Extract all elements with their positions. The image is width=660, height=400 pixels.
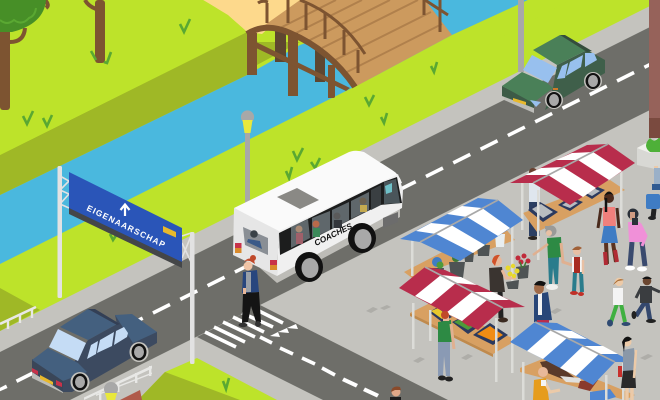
first road dash	[0, 385, 8, 391]
bus shadow	[260, 205, 400, 283]
left pole	[58, 166, 62, 298]
bridge back posts	[275, 30, 325, 82]
potted plants and bucket	[432, 234, 505, 278]
person behind top stall	[528, 168, 540, 240]
tree right	[85, 0, 105, 63]
flower seller	[489, 255, 516, 322]
stall 1 table	[523, 180, 625, 232]
car side windows	[87, 327, 128, 359]
child red vest	[570, 246, 584, 296]
bus tail lights	[235, 243, 277, 270]
car trunk	[115, 314, 157, 343]
woman grey top	[618, 337, 636, 400]
bus logo: COACHES	[312, 221, 354, 248]
bus window band	[279, 177, 402, 255]
stall 1 red awning	[510, 144, 635, 205]
canal water	[0, 0, 528, 264]
man green shirt from behind	[438, 311, 454, 382]
bridge deck	[262, 0, 452, 88]
bus roof	[234, 151, 402, 233]
car hood	[32, 348, 87, 381]
bus rear	[233, 208, 279, 276]
grass tufts	[23, 19, 437, 240]
green car front	[502, 86, 534, 108]
bus passengers	[296, 198, 367, 244]
car shadow bumper	[32, 372, 63, 393]
road centre dashes	[16, 60, 660, 381]
planter and plant	[637, 136, 660, 170]
man navy jacket	[534, 281, 552, 323]
green car roof	[533, 35, 587, 65]
woman head	[244, 262, 252, 270]
deck planks	[280, 0, 442, 73]
blue car	[32, 309, 157, 393]
car front	[32, 359, 63, 392]
woman legs	[242, 292, 261, 323]
give way triangles	[270, 324, 298, 337]
boy dark top	[632, 276, 660, 323]
green car plate and lamp	[513, 88, 558, 107]
stall 3 crates	[429, 307, 508, 345]
bus grille	[383, 212, 398, 228]
stall 3 red awning	[399, 267, 525, 330]
right lattice	[182, 233, 191, 262]
building corner	[649, 0, 660, 138]
left lattice	[60, 176, 69, 208]
car side	[63, 315, 157, 392]
green car windscreen	[523, 55, 557, 83]
sign arrow	[120, 204, 130, 216]
car wheels	[70, 342, 148, 392]
car plate and lights	[32, 368, 62, 387]
green car windows	[557, 53, 597, 79]
stall 1 poles	[521, 160, 622, 260]
bus side windows	[291, 179, 400, 248]
bus skylight	[277, 188, 319, 209]
dark grass left corner	[0, 288, 40, 331]
top grass curved edge	[0, 0, 247, 155]
stall 3 table	[410, 303, 517, 357]
green car hood	[502, 72, 553, 103]
stall 2 blue awning	[400, 198, 523, 261]
coach bus	[233, 151, 403, 283]
zebra crossing	[205, 310, 283, 347]
bus wheels	[295, 223, 376, 282]
right pole	[190, 232, 194, 364]
sign plate	[163, 226, 176, 238]
girl green trousers	[607, 278, 630, 326]
woman pink top blue skirt	[598, 192, 619, 265]
sand path	[203, 0, 300, 34]
tree left	[0, 0, 48, 110]
cross road	[197, 305, 448, 400]
tuft lower	[223, 378, 229, 389]
stall 1 crates	[528, 185, 605, 222]
grass bank	[0, 32, 300, 195]
bridge front posts and arch	[247, 28, 355, 98]
man at bottom head	[390, 387, 401, 400]
woman crossing road	[238, 255, 261, 327]
stall 2 poles	[411, 225, 514, 285]
lower cross road dashes	[342, 378, 379, 398]
green car	[502, 35, 605, 113]
sign text: EIGENAARSCHAP	[85, 203, 167, 250]
sign gantry	[58, 166, 194, 364]
stall 2 table	[404, 222, 515, 278]
lower railing	[84, 366, 152, 400]
stall 4 poles	[522, 362, 624, 400]
car windscreen	[49, 329, 86, 361]
street lamp	[241, 110, 254, 230]
woman headscarf pink top	[625, 208, 647, 272]
woman jacket	[242, 270, 259, 293]
sign board	[69, 172, 182, 262]
green car side	[545, 50, 605, 110]
lower grass corner	[138, 358, 277, 400]
stall 4 blue awning	[510, 322, 633, 385]
stall 4 table	[520, 358, 635, 400]
bus rear window	[243, 227, 268, 255]
cross road dashes	[260, 337, 335, 375]
woman grey hair green shirt	[533, 226, 575, 290]
pavement tile marks	[366, 305, 653, 363]
left railing	[0, 307, 36, 329]
wooden bridge	[247, 0, 452, 98]
bus side	[277, 174, 403, 276]
far lamp pole	[518, 0, 524, 72]
pale grass edge over bridge foot	[318, 0, 570, 130]
deck railing far	[258, 0, 448, 73]
green car bumper	[504, 96, 534, 113]
stall 3 poles	[412, 303, 514, 382]
bald man orange shirt	[533, 367, 560, 400]
green car wheels	[545, 72, 602, 109]
sign underside	[69, 207, 182, 268]
flower pots	[506, 254, 530, 289]
person at right edge with bag	[646, 166, 660, 220]
car roof	[60, 309, 117, 340]
lower brick and lamp	[104, 382, 142, 400]
stall 4 goods	[540, 360, 616, 400]
